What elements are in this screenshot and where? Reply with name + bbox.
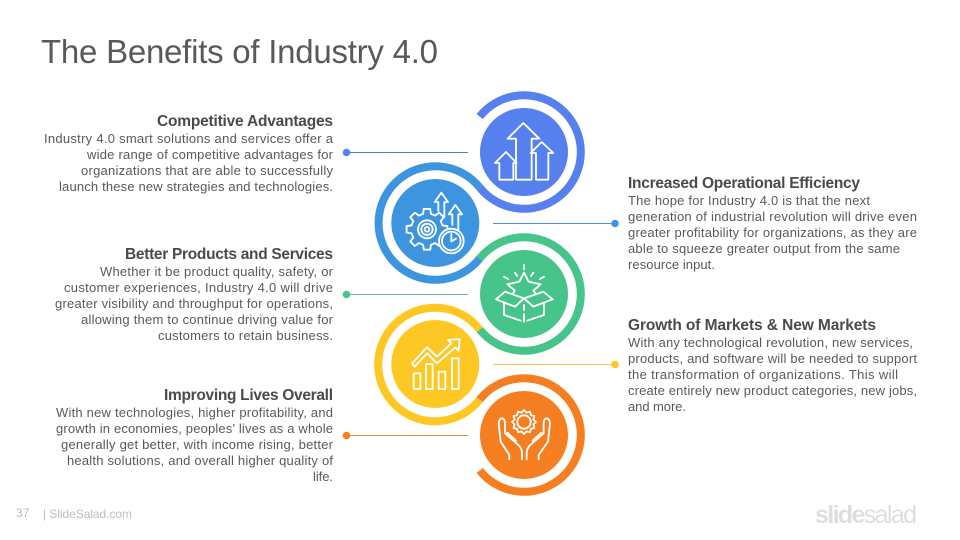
ring: yellow (378, 308, 480, 421)
connector: growth of markets (493, 361, 619, 368)
body text (628, 193, 917, 272)
body text: greater profitability for organizations, as they are (628, 225, 917, 240)
icon: bar chart with arrow (412, 339, 460, 389)
badge: open box with star (480, 250, 568, 338)
badge: hands and gear (480, 391, 568, 479)
heading: Growth of Markets & New Markets (628, 317, 876, 334)
body text: generally get better, with income rising, better (61, 437, 334, 452)
icon: box and star (496, 265, 553, 322)
badge: growth chart (391, 320, 479, 408)
badge: gear and clock (391, 179, 479, 267)
body text: allowing them to continue driving value for (81, 312, 334, 327)
body text (55, 264, 334, 343)
body text: customers to retain business. (158, 328, 333, 343)
ring: sky blue (379, 166, 480, 280)
body text: resource input. (628, 257, 715, 272)
body text: wide range of competitive advantages for (86, 147, 334, 162)
body text: With new technologies, higher profitability, and (56, 405, 333, 420)
panel: Better Products and Services (55, 246, 334, 343)
heading: Better Products and Services (125, 246, 333, 263)
body text: able to squeeze greater output from the same (628, 241, 900, 256)
icon: three rising arrows (495, 123, 553, 180)
body text: health solutions, and overall higher quality of (67, 453, 333, 468)
body text: create entirely new product categories, new jobs, (628, 383, 917, 398)
body text: and more. (628, 399, 686, 414)
body text (44, 131, 334, 194)
heading: Competitive Advantages (157, 113, 333, 130)
body text: launch these new strategies and technologies. (59, 179, 333, 194)
panel: Increased Operational Efficiency (628, 175, 917, 272)
body text: organizations that are able to successfully (81, 163, 334, 178)
panel: Improving Lives Overall (56, 387, 334, 484)
heading: Increased Operational Efficiency (628, 175, 860, 192)
connector: better products (343, 291, 468, 298)
body text: products, and software will be needed to support (628, 351, 917, 366)
page number: 37 (16, 506, 30, 520)
body text: generation of industrial revolution will drive even (628, 209, 917, 224)
body text: the transformation of organizations. This will (628, 367, 898, 382)
icon: hands holding gear (499, 410, 550, 459)
icon: gear, clock and arrows (407, 193, 464, 253)
body text (56, 405, 334, 484)
logo wordmark: slidesalad (815, 501, 917, 529)
ring: green (480, 237, 581, 351)
body text: greater visibility and throughput for operations, (55, 296, 333, 311)
body text: life. (313, 469, 333, 484)
body text (628, 335, 917, 414)
badge: rising arrows (480, 108, 568, 196)
source label: | SlideSalad.com (43, 507, 132, 521)
connector: competitive advantages (343, 149, 468, 156)
body text: The hope for Industry 4.0 is that the next (628, 193, 870, 208)
ring: orange (480, 378, 581, 492)
panel: Growth of Markets & New Markets (628, 317, 917, 414)
body text: growth in economies, peoples' lives as a whole (56, 421, 333, 436)
connector: operational efficiency (493, 220, 619, 227)
ring: blue (480, 95, 581, 209)
body text: customer experiences, Industry 4.0 will drive (64, 280, 333, 295)
panel: Competitive Advantages (44, 113, 334, 194)
heading: Improving Lives Overall (164, 387, 333, 404)
connector: improving lives (343, 432, 468, 439)
body text: With any technological revolution, new services, (628, 335, 913, 350)
title: The Benefits of Industry 4.0 (41, 33, 438, 70)
body text: Industry 4.0 smart solutions and services offer a (44, 131, 334, 146)
body text: Whether it be product quality, safety, or (100, 264, 334, 279)
